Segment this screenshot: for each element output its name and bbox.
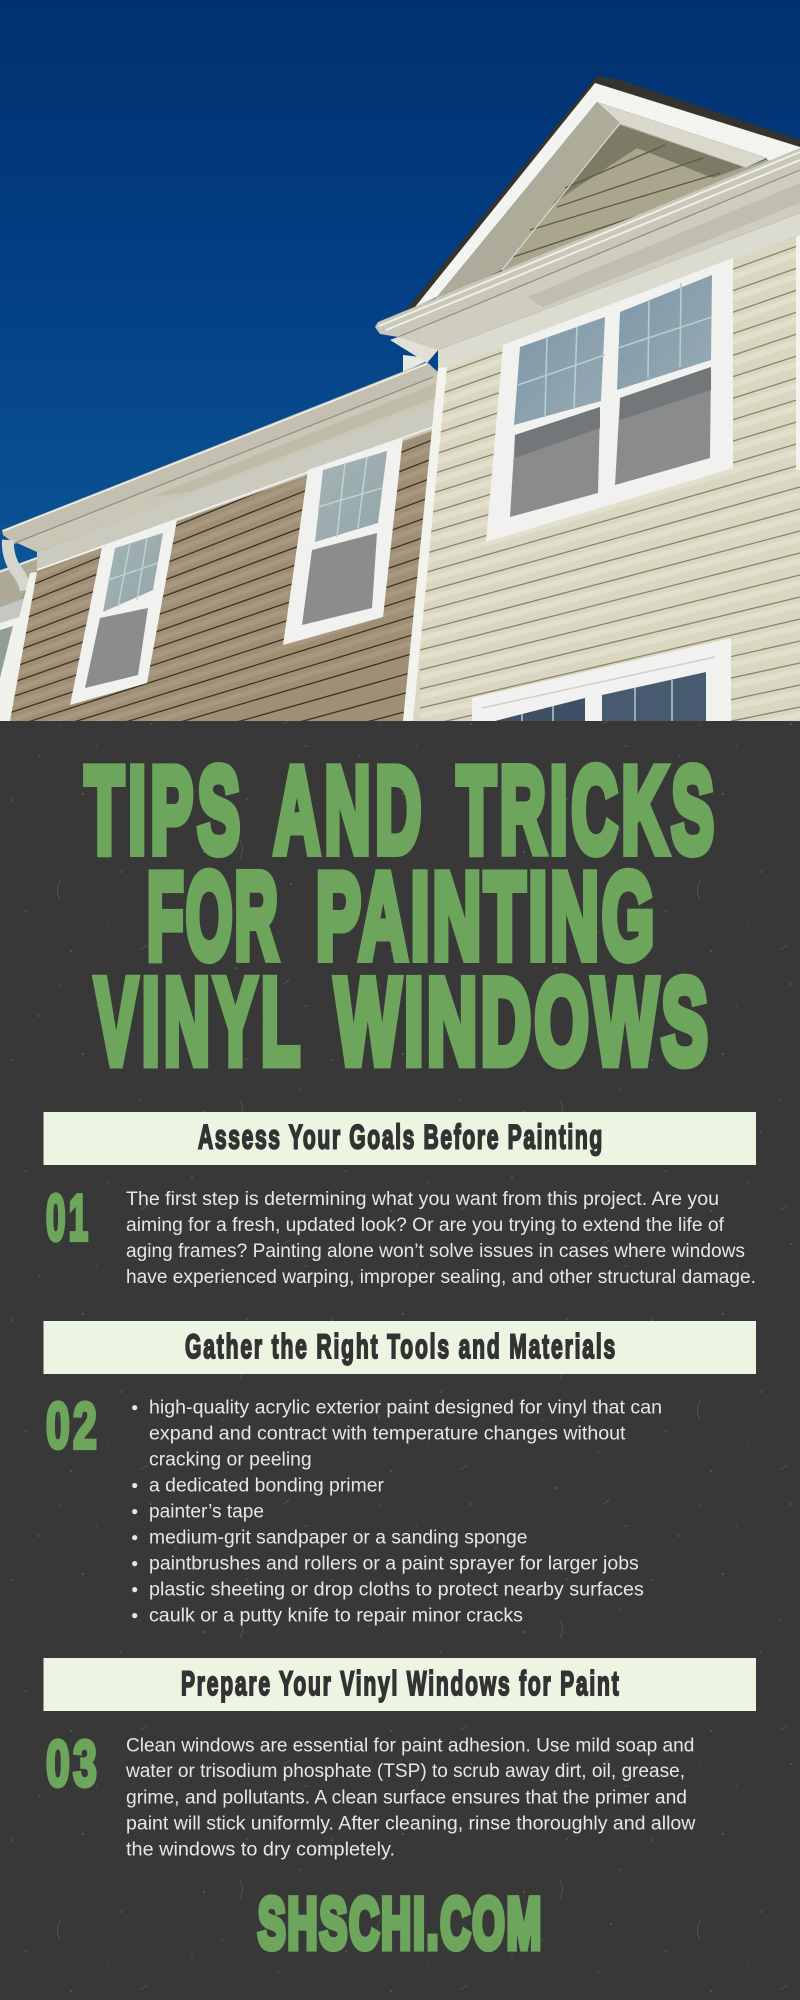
section 2 bullet list: caulk or a putty knife to repair minor cracks <box>149 1605 523 1626</box>
section 1: assess your goals <box>44 1112 756 1288</box>
left window <box>70 520 177 705</box>
sky <box>0 0 800 722</box>
section 3: prepare vinyl windows <box>44 1658 756 1860</box>
section 2 heading bar: Gather the Right Tools and Materials <box>185 1327 615 1365</box>
title: TIPS <box>85 742 240 878</box>
section 1 body text: The first step is determining what you want from this project. Are you <box>126 1189 719 1210</box>
neighbouring building soffit and window at left edge <box>0 557 37 702</box>
left brown siding wall <box>10 430 432 721</box>
section 2 bullet list: medium-grit sandpaper or a sanding sponge <box>149 1527 528 1548</box>
gable roof and trim <box>405 76 800 316</box>
number 03: 03 <box>46 1727 97 1800</box>
section 1 heading bar: Assess Your Goals Before Painting <box>198 1117 602 1156</box>
section 2 heading bar <box>44 1321 756 1374</box>
main gutter, soffit and fascia <box>375 148 800 372</box>
small white roof box <box>403 355 425 372</box>
section 2 bullet list: plastic sheeting or drop cloths to protect nearby surfaces <box>149 1579 644 1600</box>
title: FOR <box>147 849 278 985</box>
title: VINYL <box>95 953 300 1090</box>
section 3 body text: the windows to dry completely. <box>126 1839 395 1860</box>
section 1 body text: have experienced warping, improper sealing, and other structural damage. <box>126 1267 756 1288</box>
section 3 body text: grime, and pollutants. A clean surface ensures that the primer and <box>126 1788 687 1808</box>
bottom window top edge <box>472 638 731 722</box>
white corner trim <box>403 367 447 721</box>
number 02: 02 <box>46 1389 97 1462</box>
section 3 heading bar <box>44 1658 756 1711</box>
section 3 body text: water or trisodium phosphate (TSP) to scrub away dirt, oil, grease, <box>125 1761 685 1782</box>
dark textured content panel background <box>0 721 800 2000</box>
section 2 bullet list: paintbrushes and rollers or a paint sprayer for larger jobs <box>149 1553 639 1574</box>
section 1 body text <box>126 1189 756 1288</box>
number 01: 01 <box>46 1183 88 1255</box>
hero photo: house with vinyl siding and windows against a blue sky <box>0 0 800 721</box>
section 3 body text <box>125 1735 696 1860</box>
title: AND <box>274 742 421 878</box>
section 3 body text: paint will stick uniformly. After cleaning, rinse thoroughly and allow <box>126 1814 696 1834</box>
title: TRICKS <box>457 742 714 878</box>
left edge white trim <box>0 572 37 721</box>
section 2 bullet list <box>132 1397 662 1626</box>
section 2: gather tools and materials <box>44 1321 756 1626</box>
right cream siding wall <box>413 235 800 721</box>
section 1 body text: aiming for a fresh, updated look? Or are you trying to extend the life of <box>126 1215 725 1236</box>
section 2 bullet list: expand and contract with temperature changes without <box>149 1423 626 1444</box>
section 2 bullet list: a dedicated bonding primer <box>149 1475 385 1496</box>
section 3 body text: Clean windows are essential for paint adhesion. Use mild soap and <box>126 1735 694 1756</box>
title: PAINTING <box>316 848 654 984</box>
section 3 heading bar: Prepare Your Vinyl Windows for Paint <box>181 1664 619 1702</box>
middle window <box>283 437 403 645</box>
left roof soffit and gutter <box>2 362 440 571</box>
footer website: SHSCHI.COM <box>258 1884 541 1964</box>
large upper window <box>486 258 733 542</box>
section 2 bullet list: painter’s tape <box>149 1501 264 1522</box>
section 2 bullet list: cracking or peeling <box>149 1450 312 1470</box>
title <box>85 742 714 1091</box>
section 1 body text: aging frames? Painting alone won’t solve issues in cases where windows <box>126 1241 745 1262</box>
downspout <box>8 540 26 590</box>
section 2 bullet list: high-quality acrylic exterior paint designed for vinyl that can <box>149 1397 662 1418</box>
section 1 heading bar <box>44 1112 756 1165</box>
title: WINDOWS <box>335 954 708 1091</box>
